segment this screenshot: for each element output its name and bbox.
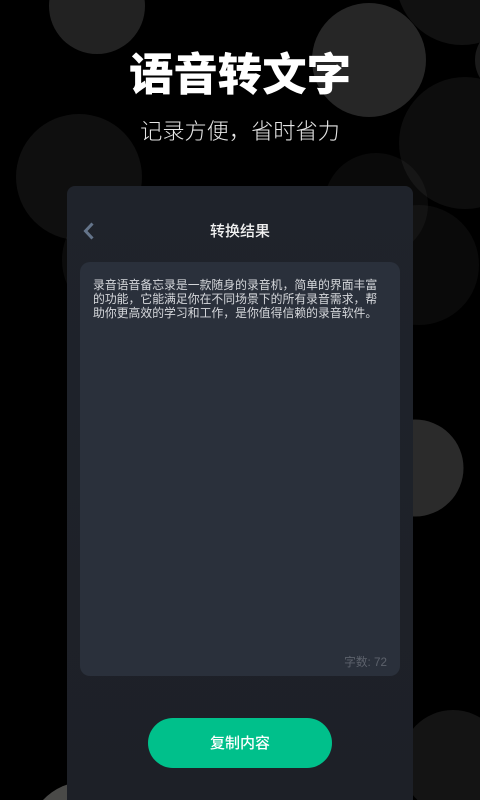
button: copy content: 复制内容 xyxy=(210,735,270,752)
title: 语音转文字 xyxy=(129,51,351,100)
text block: transcribed text: 的功能，它能满足你在不同场景下的所有录音需求，帮 xyxy=(93,292,377,306)
heading: conversion result: 转换结果 xyxy=(210,223,270,240)
character count: 字数: 72 xyxy=(344,656,387,669)
text block: transcribed text xyxy=(93,278,377,320)
icon: back arrow xyxy=(84,222,94,240)
subtitle: 记录方便，省时省力 xyxy=(140,119,340,144)
text block: transcribed text: 录音语音备忘录是一款随身的录音机，简单的界面丰富 xyxy=(93,278,377,292)
text block: transcribed text: 助你更高效的学习和工作，是你值得信赖的录音软件。 xyxy=(93,306,377,320)
panel: text area xyxy=(80,262,400,676)
button: copy content xyxy=(148,718,332,768)
panel: result screen xyxy=(67,186,413,800)
